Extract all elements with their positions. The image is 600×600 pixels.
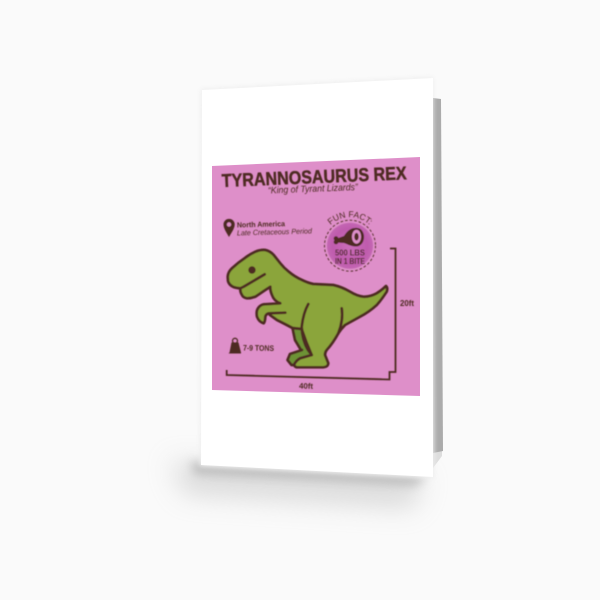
location text: Late Cretaceous Period bbox=[237, 226, 313, 237]
card front edge glow bbox=[200, 77, 434, 478]
location text: North America bbox=[237, 219, 286, 229]
card back panel bbox=[433, 98, 443, 453]
rear leg bbox=[288, 326, 312, 365]
eye bbox=[248, 266, 256, 274]
badge text: IN 1 BITE bbox=[335, 257, 365, 266]
mouth line bbox=[240, 274, 265, 288]
card front bbox=[201, 78, 433, 477]
location text bbox=[237, 219, 313, 237]
body bbox=[228, 250, 387, 367]
badge disc bbox=[327, 223, 373, 269]
thigh line bbox=[302, 304, 312, 355]
weight text: 7-9 TONS bbox=[243, 344, 275, 353]
label: length: 40ft bbox=[299, 382, 314, 391]
panel: pink artwork bbox=[212, 157, 420, 396]
fun fact badge bbox=[323, 210, 377, 272]
badge text bbox=[335, 249, 365, 266]
icon: ham bbox=[334, 228, 364, 247]
label: height: 20ft bbox=[400, 299, 414, 308]
icon: location pin bbox=[224, 219, 235, 237]
haunch line bbox=[338, 308, 342, 333]
badge text: 500 LBS bbox=[335, 249, 365, 258]
badge heading: FUN FACT: bbox=[326, 210, 372, 225]
subtitle: “King of Tyrant Lizards” bbox=[268, 182, 359, 195]
badge dashed ring bbox=[324, 220, 376, 271]
illustration: t-rex bbox=[228, 250, 387, 367]
arm line bbox=[269, 311, 285, 315]
icon: weight bbox=[228, 338, 241, 354]
dimension brackets bbox=[227, 248, 396, 380]
card drop shadow bbox=[170, 450, 442, 508]
title: TYRANNOSAURUS REX bbox=[221, 162, 408, 191]
